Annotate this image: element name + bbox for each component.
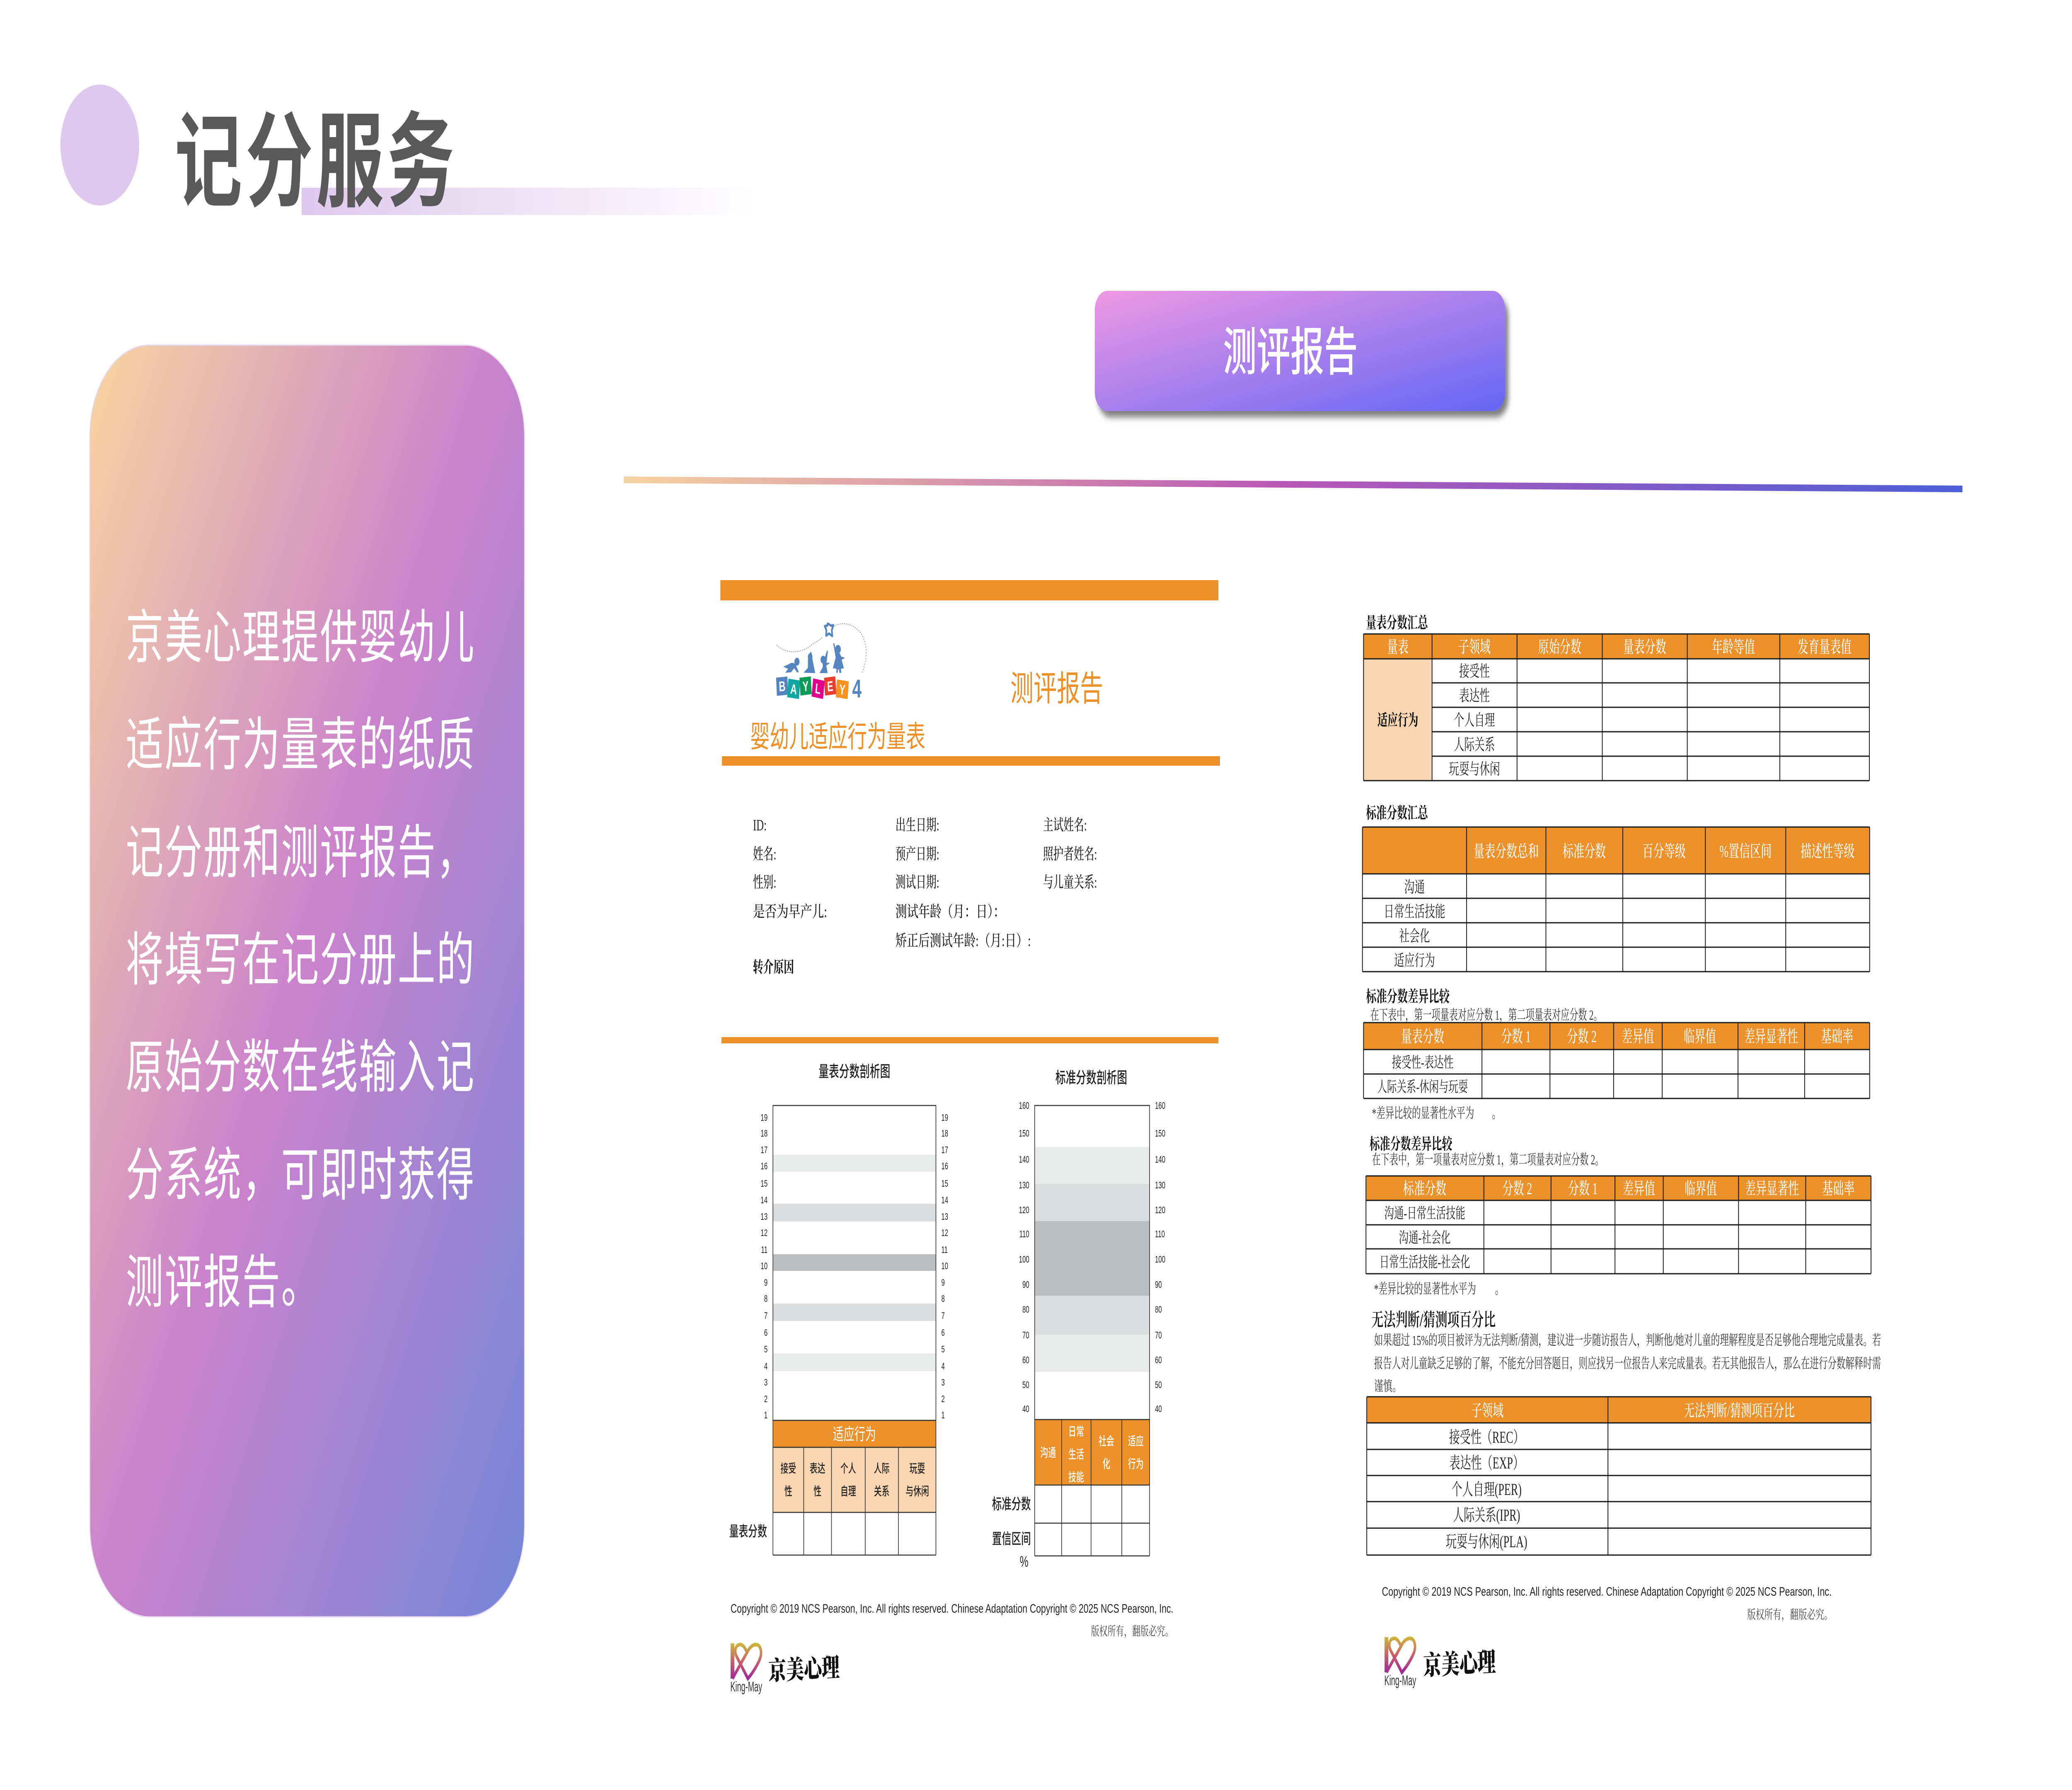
note: 在下表中，第一项量表对应分数 1，第二项量表对应分数 2。 (1370, 1007, 1602, 1023)
subdomain labels: 表达 (810, 1462, 825, 1476)
report title: 测评报告 (1010, 670, 1103, 709)
info fields: 测试年龄（月：日）： (896, 903, 1005, 920)
row labels: 置信区间 (992, 1531, 1031, 1547)
axis right: 140 (1155, 1154, 1165, 1165)
axis right: 8 (941, 1294, 945, 1304)
dotted arc (777, 624, 866, 674)
header labels: 行为 (1128, 1457, 1144, 1471)
subdomain labels: 与休闲 (905, 1485, 929, 1498)
axis right: 9 (941, 1277, 945, 1288)
info fields: 预产日期: (896, 845, 939, 863)
star (825, 624, 833, 636)
axis right: 17 (941, 1145, 948, 1156)
row labels: 日常生活技能-社会化 (1380, 1254, 1470, 1270)
axis left: 11 (761, 1245, 767, 1255)
axis right: 130 (1155, 1180, 1165, 1191)
axis left: 150 (1019, 1128, 1029, 1139)
paragraph: 如果超过 15%的项目被评为无法判断/猜测，建议进一步随访报告人，判断他/她对儿童的理解程度是否足够他合理地完成量表。若 (1374, 1333, 1881, 1348)
panel text: 将填写在记分册上的 (126, 928, 475, 993)
row labels: 社会化 (1399, 927, 1430, 945)
paragraph (1374, 1333, 1881, 1394)
panel text: 分系统，可即时获得 (126, 1143, 475, 1208)
axis right: 11 (941, 1245, 948, 1255)
axis left (761, 1113, 767, 1421)
header labels: %置信区间 (1719, 842, 1772, 861)
peach subdomain row (773, 1447, 936, 1512)
axis left: 40 (1022, 1404, 1029, 1415)
bands (1035, 1147, 1150, 1372)
header labels: 临界值 (1685, 1179, 1717, 1198)
axis right: 60 (1155, 1355, 1162, 1366)
grid (1363, 827, 1870, 972)
info fields: 出生日期: (896, 816, 939, 834)
grid (1363, 1023, 1870, 1098)
axis right: 19 (941, 1113, 948, 1123)
header labels: 无法判断/猜测项百分比 (1684, 1401, 1795, 1420)
axis right: 90 (1155, 1280, 1162, 1290)
axis right (941, 1113, 948, 1421)
scale title: 婴幼儿适应行为量表 (750, 720, 925, 753)
heading: 标准分数差异比较 (1370, 1135, 1453, 1153)
chart frame (773, 1105, 936, 1420)
orange divider (721, 1037, 1218, 1043)
button: report heading (1095, 291, 1505, 411)
header labels: 量表 (1387, 638, 1409, 656)
letter blocks: 4 (852, 675, 862, 703)
chart title: 标准分数剖析图 (1055, 1069, 1127, 1086)
panel: report page 1 (720, 580, 1220, 1695)
info fields: 转介原因 (753, 958, 794, 976)
row labels: 接受性（REC） (1449, 1428, 1524, 1447)
chart title: 量表分数剖析图 (818, 1063, 890, 1080)
axis right: 12 (941, 1228, 948, 1238)
grid (1367, 1397, 1871, 1555)
row labels (1384, 878, 1445, 969)
axis right: 14 (941, 1195, 948, 1206)
axis left: 12 (761, 1228, 767, 1238)
panel text: 原始分数在线输入记 (126, 1035, 475, 1100)
axis left: 18 (761, 1128, 767, 1139)
table: scale score difference (1363, 988, 1870, 1121)
axis left: 110 (1019, 1229, 1029, 1240)
panel text: 京美心理提供婴幼儿 (126, 605, 475, 670)
axis left: 16 (761, 1161, 767, 1172)
table: standard score summary (1363, 804, 1870, 972)
letter blocks: Y (802, 678, 809, 695)
letter blocks: B (779, 679, 786, 695)
axis right: 110 (1155, 1229, 1165, 1240)
row labels: 人际关系 (1454, 736, 1495, 753)
header labels: 量表分数 (1401, 1027, 1444, 1046)
axis left (1019, 1101, 1029, 1415)
header row (1363, 1023, 1870, 1050)
axis right: 3 (941, 1377, 945, 1388)
copyright: Copyright © 2019 NCS Pearson, Inc. All rights reserved. Chinese Adaptation Copyright © 2025 NCS Pearson, Inc. (731, 1602, 1173, 1616)
axis right: 40 (1155, 1404, 1162, 1415)
axis right: 4 (941, 1361, 945, 1372)
row labels: 标准分数 (992, 1496, 1031, 1512)
row labels: 表达性（EXP） (1450, 1454, 1524, 1472)
header labels: 量表分数总和 (1474, 842, 1539, 861)
info fields (753, 816, 1097, 976)
row labels: 人际关系-休闲与玩耍 (1377, 1079, 1468, 1095)
axis left: 140 (1019, 1154, 1029, 1165)
subdomain labels: 人际 (874, 1462, 889, 1476)
axis left: 100 (1019, 1254, 1029, 1265)
axis right: 80 (1155, 1304, 1162, 1315)
title underline highlight (302, 188, 755, 215)
axis right: 16 (941, 1161, 948, 1172)
grid (1366, 1176, 1871, 1274)
letter blocks: E (827, 678, 834, 695)
copyright (731, 1602, 1173, 1638)
subdomain labels: 性 (784, 1485, 792, 1498)
axis left: 19 (761, 1113, 767, 1123)
row labels (1377, 1054, 1468, 1095)
row labels: % (1020, 1554, 1029, 1570)
table: unable to judge percentage (1367, 1310, 1881, 1555)
title: 记分服务 (175, 104, 457, 220)
header row (1363, 634, 1869, 659)
panel background (90, 345, 525, 1617)
header labels: 化 (1102, 1457, 1110, 1471)
row labels: 个人自理(PER) (1452, 1481, 1522, 1499)
header labels (1040, 1425, 1144, 1484)
axis left: 60 (1022, 1355, 1029, 1366)
panel text: 记分册和测评报告， (126, 820, 475, 885)
header labels: 差异值 (1623, 1179, 1655, 1198)
header labels: 临界值 (1684, 1027, 1716, 1046)
button: report heading: 测评报告 (1223, 324, 1358, 381)
subdomain labels: 玩耍 (910, 1462, 925, 1476)
axis left: 17 (761, 1145, 767, 1156)
header labels (1403, 1179, 1854, 1198)
axis left: 120 (1019, 1205, 1029, 1216)
subdomain labels: 性 (813, 1485, 821, 1498)
silhouettes: children (784, 643, 845, 673)
bands (773, 1155, 936, 1371)
row labels: 适应行为 (1377, 711, 1418, 729)
header row (1367, 1397, 1871, 1423)
header labels: 描述性等级 (1801, 842, 1854, 861)
axis right: 160 (1155, 1101, 1165, 1111)
letter blocks: A (790, 681, 797, 698)
axis left: 130 (1019, 1180, 1029, 1191)
copyright: 版权所有，翻版必究。 (1091, 1625, 1173, 1638)
logo: King-May: 京美心理 (768, 1653, 840, 1686)
header labels: 沟通 (1040, 1446, 1056, 1460)
significance note: 。 (1495, 1281, 1504, 1297)
grid (1363, 634, 1869, 781)
header labels: 基础率 (1822, 1179, 1854, 1198)
logo: King-May: King-May (730, 1679, 762, 1695)
table: standard score difference (1366, 1135, 1871, 1297)
axis left: 14 (761, 1195, 767, 1206)
gradient divider line (624, 477, 1963, 492)
axis left: 3 (764, 1377, 767, 1388)
page title block (61, 85, 755, 220)
axis left: 13 (761, 1212, 767, 1222)
axis left: 9 (764, 1277, 767, 1288)
note: 在下表中，第一项量表对应分数 1，第二项量表对应分数 2。 (1372, 1152, 1604, 1168)
header labels: 分数 2 (1503, 1179, 1532, 1198)
copyright: 版权所有，翻版必究。 (1747, 1608, 1833, 1622)
axis right: 50 (1155, 1380, 1162, 1391)
header labels: 发育量表值 (1798, 638, 1852, 656)
header labels: 差异值 (1622, 1027, 1654, 1046)
subdomain labels: 自理 (840, 1485, 856, 1498)
header labels: 差异显著性 (1744, 1027, 1798, 1046)
orange header (773, 1420, 936, 1447)
heading: 标准分数汇总 (1366, 804, 1428, 822)
significance note: *差异比较的显著性水平为 (1374, 1281, 1476, 1297)
info fields: 主试姓名: (1043, 816, 1087, 834)
axis right: 1 (941, 1410, 945, 1421)
row labels: 沟通-社会化 (1399, 1229, 1451, 1246)
axis left: 1 (764, 1410, 767, 1421)
row labels: 适应行为 (1394, 952, 1435, 969)
chart: standard score profile (992, 1069, 1165, 1570)
letter blocks: L (814, 681, 821, 698)
axis right: 5 (941, 1344, 945, 1355)
logo: King-May: 京美心理 (1423, 1647, 1496, 1681)
header labels: 量表分数 (1623, 638, 1666, 656)
header labels: 社会 (1099, 1434, 1114, 1448)
header labels (1387, 638, 1852, 656)
axis left: 2 (764, 1394, 767, 1405)
header labels: 分数 2 (1567, 1027, 1597, 1046)
row labels: 人际关系(IPR) (1453, 1506, 1520, 1524)
row labels (1377, 663, 1500, 778)
info fields: 是否为早产儿: (753, 903, 827, 920)
copyright: Copyright © 2019 NCS Pearson, Inc. All rights reserved. Chinese Adaptation Copyright © 2025 NCS Pearson, Inc. (1382, 1585, 1832, 1599)
header labels: 子领域 (1471, 1401, 1503, 1420)
heading: 无法判断/猜测项百分比 (1371, 1310, 1496, 1330)
header row (1366, 1176, 1871, 1200)
significance note: *差异比较的显著性水平为 (1372, 1105, 1474, 1121)
row labels (992, 1496, 1031, 1570)
axis right: 100 (1155, 1254, 1165, 1265)
axis left: 8 (764, 1294, 767, 1304)
axis left: 160 (1019, 1101, 1029, 1111)
logo: King-May (1384, 1637, 1496, 1688)
axis left: 80 (1022, 1304, 1029, 1315)
header labels (1401, 1027, 1853, 1046)
axis right: 120 (1155, 1205, 1165, 1216)
logo: Bayley 4 (776, 624, 866, 703)
info fields: 姓名: (753, 845, 776, 863)
axis left: 15 (761, 1178, 767, 1189)
row labels: 日常生活技能 (1384, 903, 1445, 920)
axis left: 6 (764, 1328, 767, 1338)
info fields: 矫正后测试年龄:（月:日）: (896, 932, 1031, 949)
axis left: 70 (1022, 1330, 1029, 1341)
paragraph: 谨慎。 (1374, 1379, 1402, 1394)
orange header: 适应行为 (833, 1425, 876, 1444)
header labels: 子领域 (1458, 638, 1491, 656)
chart frame (1035, 1105, 1150, 1420)
orange divider (722, 756, 1220, 766)
row labels: 玩耍与休闲(PLA) (1446, 1532, 1527, 1551)
subdomain labels (780, 1462, 929, 1498)
axis left: 50 (1022, 1380, 1029, 1391)
header labels: 适应 (1128, 1434, 1144, 1448)
axis right: 70 (1155, 1330, 1162, 1341)
axis left: 90 (1022, 1280, 1029, 1290)
row labels: 接受性-表达性 (1392, 1054, 1453, 1071)
header row (1363, 827, 1870, 874)
header labels: 百分等级 (1643, 842, 1686, 861)
paragraph: 报告人对儿童缺乏足够的了解，不能充分回答题目，则应找另一位报告人来完成量表。若无其他报告人，那么在进行分数解释时需 (1374, 1356, 1881, 1372)
axis right: 150 (1155, 1128, 1165, 1139)
header labels (1471, 1401, 1795, 1420)
info fields: 与儿童关系: (1043, 873, 1097, 891)
panel: report page 2 (1363, 614, 1881, 1688)
heading: 标准分数差异比较 (1366, 988, 1450, 1005)
header labels: 技能 (1068, 1471, 1084, 1484)
header labels (1474, 842, 1854, 861)
info fields: 测试日期: (896, 873, 939, 891)
chart: scale score profile (729, 1063, 948, 1555)
axis left: 7 (764, 1311, 767, 1321)
table grid (1035, 1420, 1150, 1556)
significance note: 。 (1492, 1105, 1501, 1121)
axis right (1155, 1101, 1165, 1415)
header labels: 标准分数 (1563, 842, 1606, 861)
header labels: 年龄等值 (1712, 638, 1755, 656)
row labels (1446, 1428, 1527, 1551)
panel: description (90, 345, 525, 1617)
header labels: 标准分数 (1403, 1179, 1446, 1198)
row label: 量表分数 (729, 1524, 767, 1540)
info fields: 性别: (753, 873, 776, 891)
logo: King-May (730, 1643, 840, 1695)
header labels: 分数 1 (1568, 1179, 1598, 1198)
axis right: 15 (941, 1178, 948, 1189)
row labels: 个人自理 (1454, 711, 1495, 729)
info fields: 照护者姓名: (1043, 845, 1097, 863)
panel text: 适应行为量表的纸质 (126, 713, 475, 778)
axis right: 6 (941, 1328, 945, 1338)
peach label cell (1363, 659, 1432, 781)
row labels: 接受性 (1459, 663, 1490, 680)
info fields: ID: (753, 816, 767, 834)
table grid (773, 1420, 936, 1555)
logo: King-May: King-May (1384, 1673, 1416, 1688)
row labels: 沟通 (1404, 878, 1425, 896)
header labels: 原始分数 (1538, 638, 1581, 656)
panel text: 测评报告。 (126, 1250, 320, 1315)
row labels: 表达性 (1459, 687, 1490, 704)
header labels: 差异显著性 (1745, 1179, 1799, 1198)
header labels: 基础率 (1821, 1027, 1853, 1046)
heading: 量表分数汇总 (1366, 614, 1428, 631)
icon: lilac circle (61, 85, 139, 206)
axis left: 4 (764, 1361, 767, 1372)
row labels (1380, 1205, 1470, 1270)
table: scale score summary (1363, 614, 1869, 781)
axis right: 2 (941, 1394, 945, 1405)
header labels: 分数 1 (1501, 1027, 1531, 1046)
subdomain labels: 关系 (874, 1485, 889, 1498)
axis right: 18 (941, 1128, 948, 1139)
letter blocks (776, 675, 862, 703)
row labels: 玩耍与休闲 (1449, 760, 1500, 778)
subdomain labels: 个人 (840, 1462, 856, 1476)
axis right: 10 (941, 1261, 948, 1272)
axis right: 7 (941, 1311, 945, 1321)
axis right: 13 (941, 1212, 948, 1222)
row labels: 沟通-日常生活技能 (1385, 1205, 1465, 1222)
panel text (126, 605, 475, 1315)
header labels: 生活 (1068, 1448, 1084, 1461)
top orange bar (720, 580, 1218, 600)
orange header (1035, 1420, 1150, 1485)
subdomain labels: 接受 (780, 1462, 796, 1476)
copyright (1382, 1585, 1833, 1622)
axis left: 5 (764, 1344, 767, 1355)
axis left: 10 (761, 1261, 767, 1272)
letter blocks: Y (839, 682, 846, 698)
header labels: 日常 (1068, 1425, 1084, 1439)
